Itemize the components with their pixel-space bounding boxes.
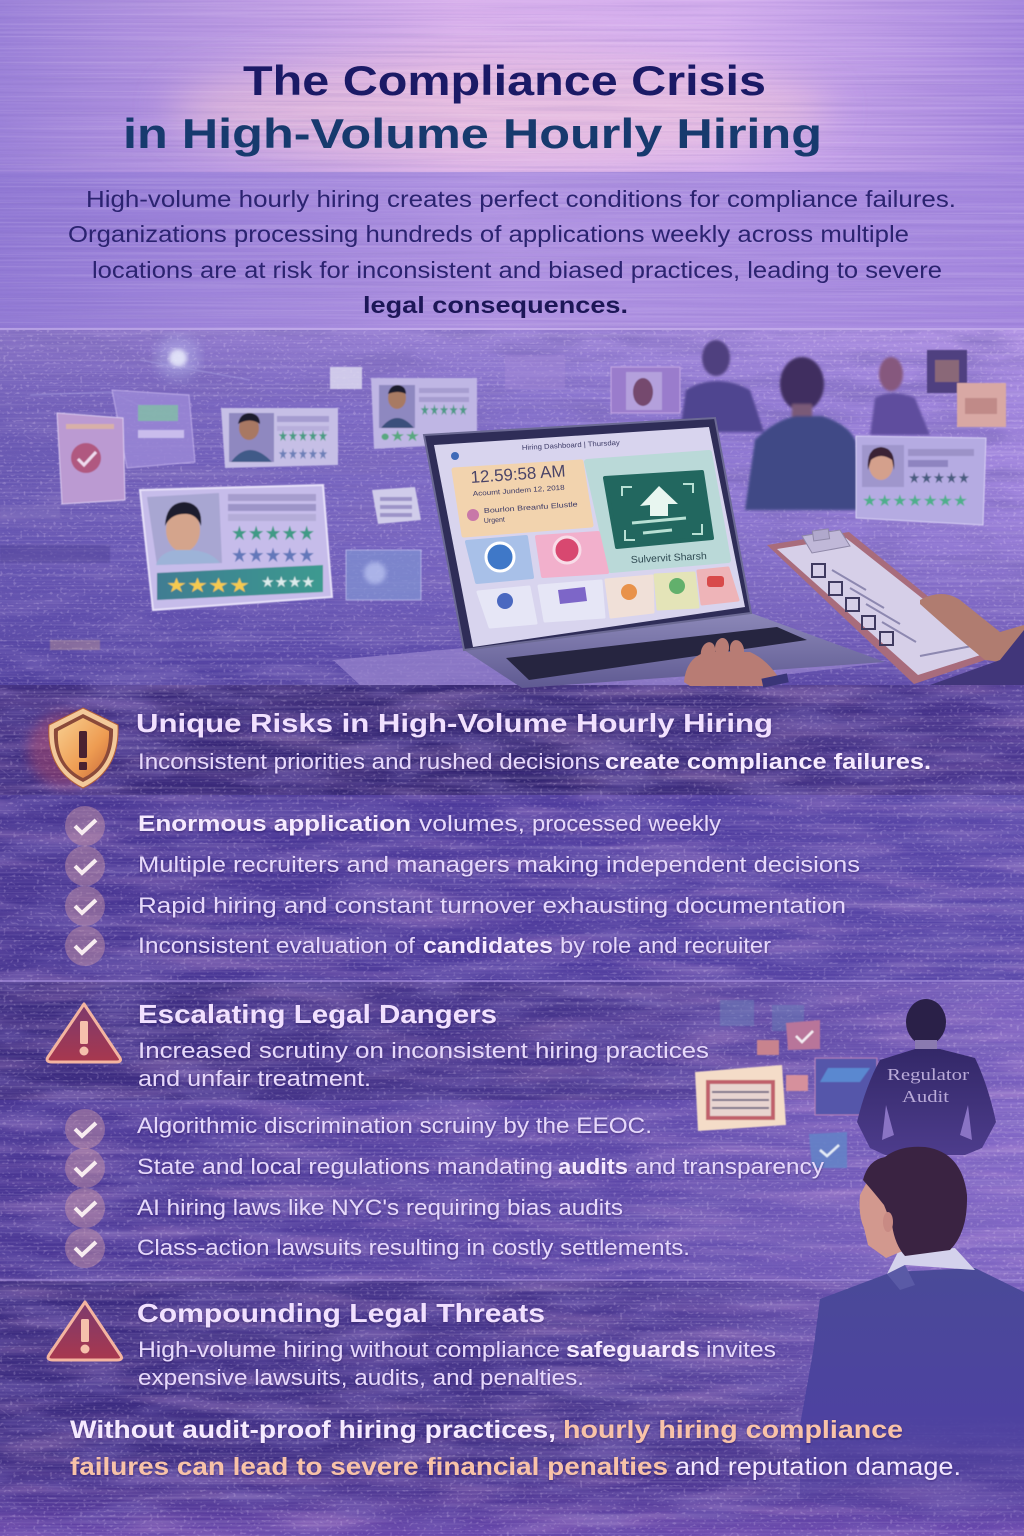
card: candidate large: ★★★★★ <box>231 523 315 545</box>
screen header: Hiring Dashboard | Thursday <box>522 440 621 452</box>
screen submit panel <box>587 453 728 570</box>
card: candidate small B <box>221 408 338 468</box>
checklist: legal dangers: Algorithmic discrimination scruiny by the EEOC. <box>137 1113 652 1138</box>
checklist: legal dangers: Class-action lawsuits resulting in costly settlements. <box>137 1235 690 1260</box>
hero illustration <box>0 336 1024 688</box>
checklist: legal dangers: and transparency <box>635 1154 824 1179</box>
closing statement: failures can lead to severe financial penalties <box>70 1453 668 1481</box>
laptop: Bourlon Breanfu Elustle <box>484 501 578 515</box>
checklist: unique risks: candidates <box>423 933 553 958</box>
panel: unique risks <box>28 708 931 966</box>
illustration: foreground man <box>800 1147 1024 1536</box>
closing statement: and reputation damage. <box>675 1453 961 1481</box>
title <box>123 57 822 157</box>
panel: escalating legal dangers <box>47 999 824 1268</box>
body text: invites <box>706 1337 776 1362</box>
background bands <box>0 0 1024 172</box>
screen time card <box>454 462 591 535</box>
checklist: unique risks: Rapid hiring and constant turnover exhausting documentation <box>138 893 846 918</box>
body text <box>138 1337 776 1390</box>
background people <box>680 340 930 510</box>
checklist: unique risks: volumes, <box>419 811 525 836</box>
label: regulator audit: Regulator <box>887 1065 969 1084</box>
icon: warning triangle <box>48 1302 122 1360</box>
checklist: unique risks: by role and recruiter <box>560 933 771 958</box>
icon: warning triangle <box>47 1004 120 1062</box>
background panels <box>0 336 1006 650</box>
intro text <box>68 186 956 318</box>
intro text: legal consequences. <box>363 292 628 318</box>
checklist: unique risks: Inconsistent evaluation of <box>138 933 416 958</box>
closing statement <box>70 1416 961 1481</box>
panel: compounding legal threats <box>48 1298 961 1481</box>
documents <box>346 487 421 600</box>
card: candidate large <box>140 485 332 610</box>
illustration: floating audit documents <box>695 1000 877 1168</box>
desk and laptop base <box>333 648 882 685</box>
body text: safeguards <box>566 1337 700 1362</box>
intro text: Organizations processing hundreds of applications weekly across multiple <box>68 221 909 247</box>
heading: Compounding Legal Threats <box>137 1298 545 1328</box>
card: candidate large: ★★★★★ <box>231 545 315 567</box>
closing statement: hourly hiring compliance <box>563 1416 903 1444</box>
checklist: legal dangers: State and local regulations mandating <box>137 1154 553 1179</box>
body text: High-volume hiring without compliance <box>138 1337 560 1362</box>
illustration: regulator figure <box>857 999 996 1155</box>
title: in High-Volume Hourly Hiring <box>123 110 822 157</box>
checklist: unique risks <box>65 806 860 966</box>
heading: Escalating Legal Dangers <box>138 999 497 1029</box>
laptop: Acoumt Jundem 12, 2018 <box>473 485 565 498</box>
title: The Compliance Crisis <box>243 57 766 104</box>
laptop <box>333 418 885 688</box>
card: candidate small B: ★★★★★ <box>278 428 328 445</box>
laptop: Urgent <box>484 517 505 525</box>
card: candidate small C: ●★★ <box>380 428 420 445</box>
checklist: unique risks: Enormous application <box>138 811 411 836</box>
label: regulator audit: Audit <box>902 1087 949 1106</box>
label: regulator audit <box>887 1065 969 1106</box>
body text: expensive lawsuits, audits, and penalties. <box>138 1365 584 1390</box>
card: candidate small C: ★★★★★ <box>420 402 468 419</box>
card: candidate large: ★★★★ <box>166 575 250 597</box>
laptop: 12.59:58 AM <box>470 461 566 487</box>
subheading: and unfair treatment. <box>138 1066 371 1091</box>
clipboard <box>767 529 1024 685</box>
subheading <box>138 1038 709 1091</box>
subheading: create compliance failures. <box>605 749 931 774</box>
card: candidate large: ★★★★ <box>261 574 315 591</box>
checklist: unique risks: Multiple recruiters and managers making independent decisions <box>138 852 860 877</box>
card: candidate right: ★★★★★ <box>908 470 970 487</box>
subheading: Increased scrutiny on inconsistent hiring practices <box>138 1038 709 1063</box>
laptop: Sulvervit Sharsh <box>631 551 707 566</box>
closing statement: Without audit-proof hiring practices, <box>70 1416 556 1444</box>
intro text: High-volume hourly hiring creates perfect conditions for compliance failures. <box>86 186 956 212</box>
checklist: legal dangers: audits <box>558 1154 628 1179</box>
card: candidate right <box>856 436 986 525</box>
checklist: legal dangers <box>65 1109 824 1268</box>
subheading <box>138 749 931 774</box>
laptop screen <box>424 418 751 650</box>
intro text: locations are at risk for inconsistent and biased practices, leading to severe <box>92 257 942 283</box>
heading: Unique Risks in High-Volume Hourly Hiring <box>136 708 773 738</box>
typing hand <box>684 637 780 686</box>
card: candidate small B: ★★★★★ <box>278 446 328 463</box>
screen tiles <box>467 537 532 582</box>
card: candidate right: ★★★★★★★ <box>862 493 968 510</box>
card: candidate small C <box>371 378 477 449</box>
card: left check <box>57 390 195 504</box>
icon: shield warning <box>28 708 118 788</box>
checklist: legal dangers: AI hiring laws like NYC's requiring bias audits <box>137 1195 623 1220</box>
subheading: Inconsistent priorities and rushed decisions <box>138 749 600 774</box>
checklist: unique risks: processed weekly <box>532 811 721 836</box>
